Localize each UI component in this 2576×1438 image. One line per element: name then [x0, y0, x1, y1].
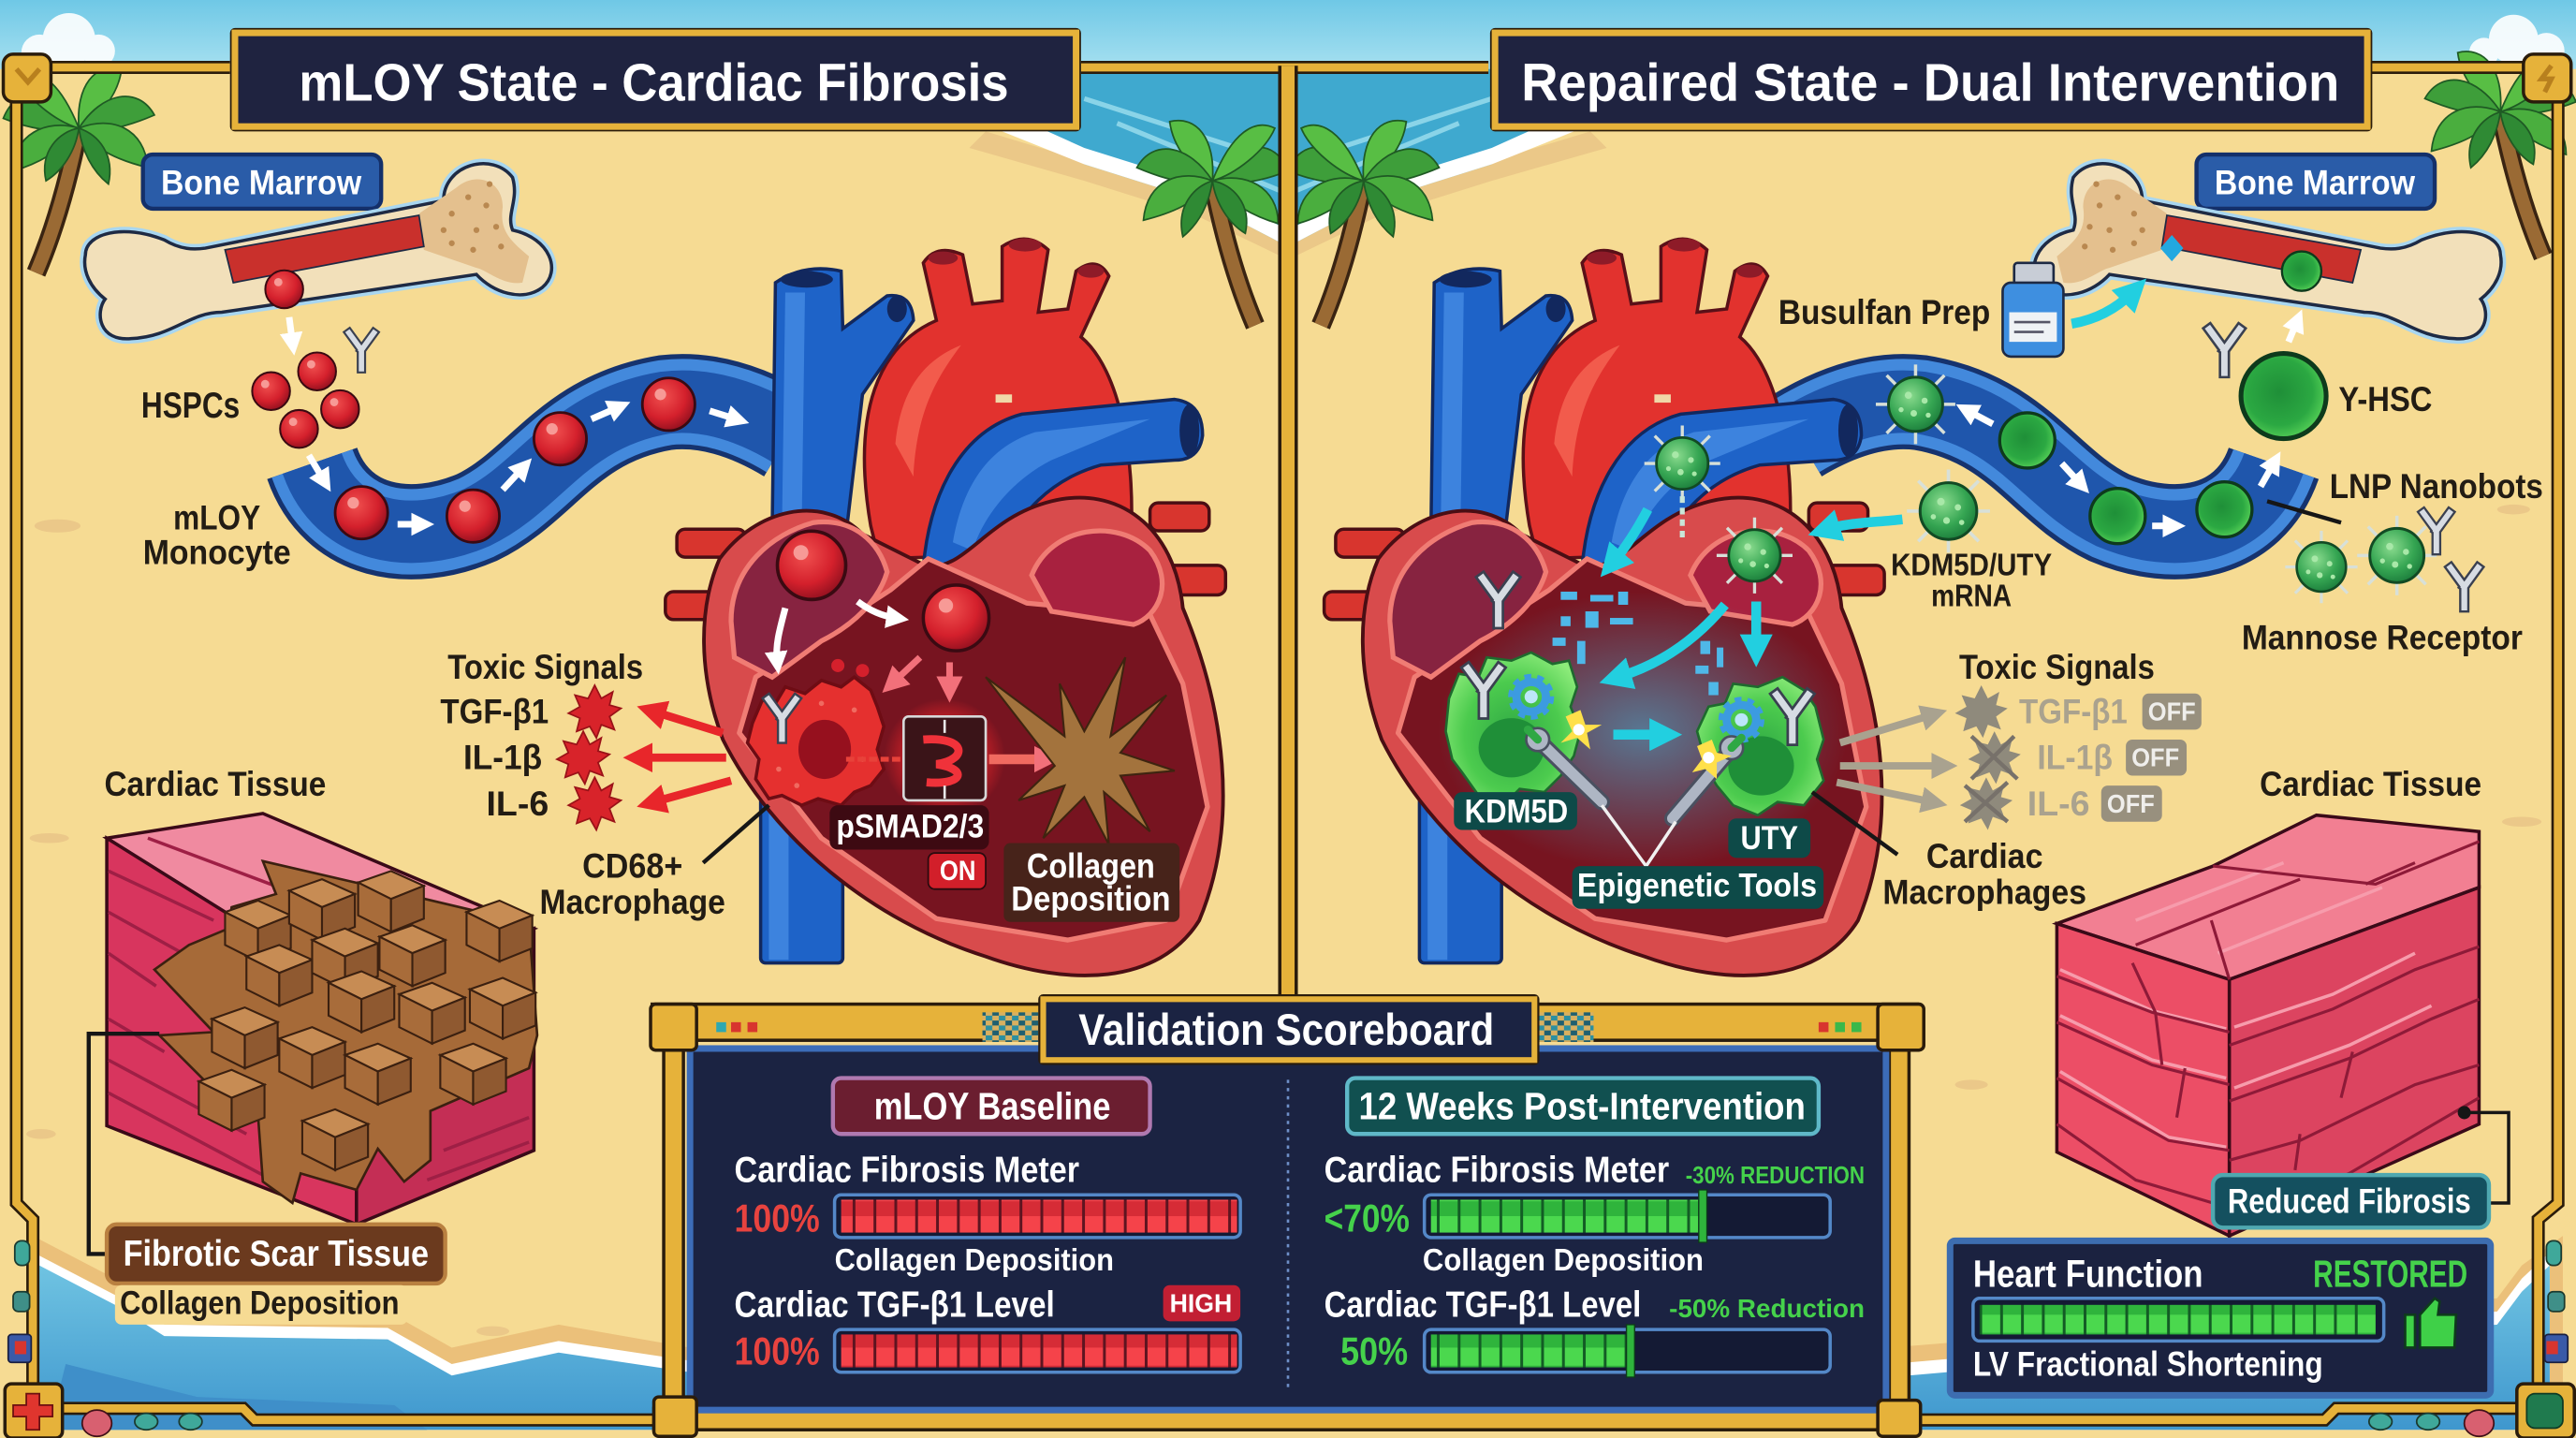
bar: post TGF: [1425, 1325, 1830, 1377]
frame ornaments: left edge: [8, 1240, 31, 1362]
label: collagen deposition under scar: Collagen Deposition: [120, 1285, 399, 1322]
label: Y-HSC: Y-HSC: [2338, 380, 2432, 418]
label: collagen deposition: Deposition: [1011, 880, 1171, 918]
label: HSPCs: HSPCs: [141, 386, 240, 426]
toxic signals: right, off: OFF: [2107, 789, 2155, 818]
bar: heart function: [1973, 1299, 2384, 1341]
toxic signals: right, off: Toxic Signals: [1959, 648, 2155, 686]
label: KDM5D/UTY mRNA: [1891, 548, 2052, 614]
heart: right: [1325, 239, 1884, 976]
title: left panel: [230, 28, 1081, 131]
blood vessel: left: [312, 402, 788, 532]
label: KDM5D/UTY mRNA: mRNA: [1931, 580, 2012, 614]
scoreboard title: [1038, 994, 1540, 1065]
toxic signals: right, off: IL-6: [2027, 785, 2089, 823]
bone niche marks: [2160, 235, 2321, 342]
bar: post fibrosis: [1425, 1190, 1830, 1242]
scoreboard title: Validation Scoreboard: [1078, 1005, 1494, 1055]
label: pSMAD2/3: pSMAD2/3: [836, 808, 984, 844]
label: mLOY monocyte: Monocyte: [143, 533, 291, 571]
label: LNP nanobots: LNP Nanobots: [2330, 467, 2543, 506]
label: cardiac tissue right: Cardiac Tissue: [2260, 765, 2481, 803]
cyan arrows into ventricle: [1614, 509, 1902, 735]
toxic signals: left: Toxic Signals: [447, 648, 643, 686]
label: mLOY monocyte: mLOY: [173, 498, 260, 536]
badge: high: [1164, 1285, 1240, 1321]
wrench: left: [1526, 728, 1602, 802]
delta: 30 percent: -30% REDUCTION: [1686, 1161, 1865, 1189]
label: CD68+ macrophage: [540, 805, 768, 921]
Y-HSC cell: [2209, 330, 2326, 487]
label: KDM5D/UTY mRNA: KDM5D/UTY: [1891, 548, 2052, 582]
tag: bone marrow right: [2197, 154, 2435, 209]
bone: left: [84, 164, 551, 339]
label: CD68+ macrophage: CD68+: [582, 847, 682, 886]
arrow: to collagen: [989, 756, 1045, 762]
title: right panel: Repaired State - Dual Intervention: [1521, 52, 2339, 111]
corner badge bottom right: green: [2517, 1384, 2574, 1438]
label: UTY: UTY: [1741, 820, 1798, 857]
label: LNP nanobots: [2267, 467, 2543, 522]
label: cardiac macrophages: Cardiac: [1926, 837, 2042, 875]
repaired tissue cube: [2056, 815, 2479, 1236]
arrow: busulfan to bone: [2071, 292, 2132, 324]
toxic signals: left: IL-1β: [463, 739, 542, 777]
monocytes in vessel: [335, 378, 736, 542]
palm tree: top left: [4, 68, 154, 272]
badge: high: HIGH: [1170, 1289, 1232, 1318]
icon: thumbs up: [2405, 1299, 2456, 1347]
label: collagen deposition: [1003, 844, 1179, 922]
label: fibrotic scar tissue: [107, 1225, 446, 1284]
label: post fibrosis meter: Cardiac Fibrosis Meter: [1325, 1150, 1669, 1190]
connector: scar tissue: [89, 1034, 159, 1254]
bone: right: [2034, 164, 2501, 339]
wrench: right: [1673, 736, 1743, 818]
toxic signals: right, off: OFF: [2131, 743, 2179, 772]
palm tree: top right: [2425, 51, 2576, 257]
sparks: [1560, 710, 1732, 779]
tag: bone marrow left: [143, 154, 381, 209]
badge: ON: ON: [940, 856, 976, 887]
frame ornaments: bottom left: [82, 1410, 202, 1436]
label: epigenetic tools: Epigenetic Tools: [1577, 868, 1817, 904]
corner badge top left: [4, 54, 51, 102]
bar: baseline fibrosis: [835, 1195, 1240, 1238]
connector: epigenetic tools: [1602, 805, 1676, 866]
connector: reduced fibrosis: [2458, 1106, 2509, 1203]
scoreboard frame: [651, 1005, 1924, 1436]
pill: mLOY baseline: [833, 1078, 1150, 1134]
palm tree: centre right: [1288, 121, 1439, 326]
toxic signals: right, off: OFF: [2148, 697, 2196, 726]
label: baseline fibrosis meter: Cardiac Fibrosis Meter: [735, 1150, 1079, 1190]
arrows: toxic release: [640, 712, 731, 802]
heart: left: [666, 239, 1225, 976]
corner badge top right: [2524, 54, 2571, 102]
value: post fibrosis: <70%: [1325, 1196, 1410, 1240]
tag: bone marrow right: Bone Marrow: [2215, 163, 2415, 201]
label: cardiac tissue left: Cardiac Tissue: [104, 765, 326, 803]
panel: heart function: [1950, 1240, 2491, 1395]
fibrotic tissue cube: [107, 814, 537, 1225]
frame ornaments: right edge: [2545, 1240, 2568, 1362]
LNP virus particles: [1645, 364, 1990, 594]
caption: collagen post: Collagen Deposition: [1423, 1243, 1704, 1278]
label: reduced fibrosis: Reduced Fibrosis: [2228, 1182, 2471, 1221]
title: left panel: mLOY State - Cardiac Fibrosis: [299, 52, 1009, 111]
icon: busulfan vial: [2002, 263, 2063, 357]
label: fibrotic scar tissue: Fibrotic Scar Tissue: [124, 1234, 429, 1274]
label: restored: RESTORED: [2313, 1252, 2467, 1295]
label: collagen deposition: Collagen: [1027, 847, 1155, 886]
label: mLOY monocyte: [143, 498, 291, 571]
toxic signals: right, off: TGF-β1: [2019, 693, 2128, 731]
collagen spiky mass: [986, 657, 1175, 844]
heart interior: left: [777, 531, 989, 687]
pSMAD signalling icon: [846, 698, 1005, 816]
label: baseline TGF: Cardiac TGF-β1 Level: [735, 1284, 1055, 1325]
pill: 12 weeks post-intervention: 12 Weeks Post-Intervention: [1358, 1084, 1806, 1127]
pill: mLOY baseline: mLOY Baseline: [874, 1084, 1110, 1127]
label: post TGF: Cardiac TGF-β1 Level: [1325, 1284, 1641, 1325]
label: heart function: Heart Function: [1973, 1252, 2203, 1295]
toxic signals: left: [440, 648, 643, 829]
label: mannose receptor: Mannose Receptor: [2242, 619, 2523, 657]
toxic signals: right, off: IL-1β: [2037, 739, 2113, 777]
value: baseline fibrosis: 100%: [735, 1196, 820, 1240]
repaired cells in vessel: [1969, 411, 2252, 544]
toxic signals: left: TGF-β1: [440, 693, 549, 731]
label: KDM5D: KDM5D: [1465, 794, 1568, 830]
tag: bone marrow left: Bone Marrow: [161, 163, 361, 201]
title: right panel: [1490, 28, 2372, 131]
right heart glow and code fragments: [1438, 579, 1848, 871]
blood vessel: right: [1797, 402, 2274, 532]
panel: validation scoreboard: [651, 994, 1924, 1436]
centre divider: [1278, 66, 1298, 999]
toxic signals: right, off: [1837, 648, 2202, 829]
label: cardiac macrophages: [1812, 792, 2086, 912]
label: LV fractional shortening: LV Fractional Shortening: [1973, 1345, 2323, 1384]
label: busulfan prep: Busulfan Prep: [1778, 293, 1990, 331]
toxic signals: left: IL-6: [487, 785, 549, 823]
badge: ON: [929, 853, 986, 889]
nanobots and receptors: [2285, 513, 2478, 608]
HSPC cluster: [252, 271, 373, 480]
delta: 50 percent: -50% Reduction: [1669, 1294, 1865, 1323]
value: post TGF: 50%: [1340, 1328, 1408, 1372]
palm tree: centre left: [1137, 121, 1288, 326]
label: cardiac macrophages: Macrophages: [1882, 873, 2086, 912]
CD68+ macrophage: [748, 677, 884, 805]
value: baseline TGF: 100%: [735, 1328, 820, 1372]
bar: baseline TGF: [835, 1329, 1240, 1372]
label: reduced fibrosis: [2213, 1175, 2489, 1227]
caption: collagen baseline: Collagen Deposition: [835, 1243, 1114, 1278]
macrophage left with KDM5D: [1445, 653, 1580, 805]
frame ornaments: bottom right: [2369, 1410, 2494, 1436]
macrophage right with UTY: [1697, 677, 1823, 815]
corner badge bottom left: red cross: [5, 1384, 63, 1438]
label: CD68+ macrophage: Macrophage: [540, 883, 725, 921]
